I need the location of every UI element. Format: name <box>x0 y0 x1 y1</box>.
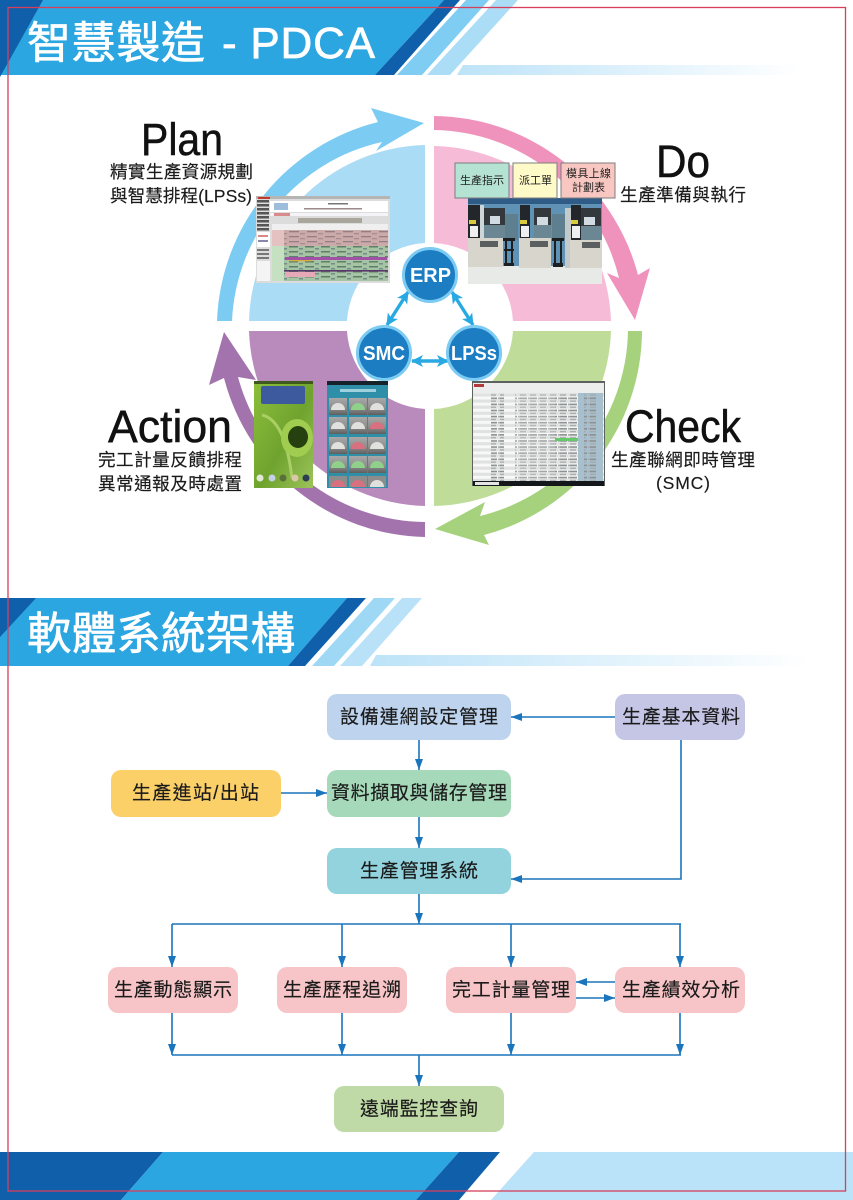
tag: production instruction: 生產指示 <box>460 173 504 187</box>
hub: SMC: SMC <box>363 343 405 365</box>
tag: mold schedule <box>561 163 615 198</box>
text block: Do <box>620 136 746 205</box>
quadrant: check <box>434 331 611 506</box>
node: production management <box>327 848 511 894</box>
photo: production machines <box>468 198 602 284</box>
screenshot: scheduling chart <box>256 196 390 283</box>
hub: ERP <box>404 248 456 302</box>
hub: LPSs: LPSs <box>451 343 497 365</box>
node: dynamic display <box>108 967 238 1013</box>
text block: Do: Do <box>656 136 710 187</box>
text block: Plan <box>110 114 253 206</box>
node: dynamic display: 生產動態顯示 <box>114 979 232 1001</box>
footer band <box>0 1152 853 1200</box>
node: completion metering <box>446 967 576 1013</box>
arrow: check <box>435 331 642 545</box>
text block: Check: (SMC) <box>656 473 710 493</box>
node: performance analysis: 生產績效分析 <box>622 979 740 1001</box>
tag: production instruction <box>455 163 509 198</box>
node: data capture <box>327 770 511 817</box>
text block: Plan: 與智慧排程(LPSs) <box>110 186 252 206</box>
arrow: do <box>434 116 650 320</box>
node: traceability: 生產歷程追溯 <box>283 979 401 1001</box>
node: network setup: 設備連網設定管理 <box>340 706 498 728</box>
node: basic data: 生產基本資料 <box>622 706 740 728</box>
tag: mold schedule: 計劃表 <box>572 180 605 194</box>
node: data capture: 資料擷取與儲存管理 <box>331 782 507 804</box>
text block: Check: 生產聯網即時管理 <box>611 450 755 470</box>
phone screenshot: notification <box>254 381 313 488</box>
hub: ERP: ERP <box>410 265 451 287</box>
title: PDCA <box>27 19 376 68</box>
text block: Check <box>611 401 755 493</box>
arrow: plan <box>217 108 424 321</box>
title: software architecture: 軟體系統架構 <box>27 610 295 659</box>
header banner: software architecture <box>0 598 811 666</box>
quadrant: action <box>249 331 425 506</box>
hub: SMC <box>358 326 410 380</box>
tag: dispatch order <box>513 163 557 198</box>
text block: Action <box>98 401 242 494</box>
text block: Action: Action <box>108 401 232 452</box>
tag: mold schedule: 模具上線 <box>566 166 611 180</box>
text block: Do: 生產準備與執行 <box>620 185 746 205</box>
title: PDCA: 智慧製造 <box>27 19 205 68</box>
node: performance analysis <box>615 967 745 1013</box>
node: network setup <box>327 694 511 740</box>
node: check in/out <box>111 770 281 817</box>
quadrant: plan <box>249 145 425 321</box>
text block: Action: 異常通報及時處置 <box>98 474 242 494</box>
node: check in/out: 生產進站/出站 <box>132 782 259 804</box>
node: remote monitoring: 遠端監控查詢 <box>360 1098 478 1120</box>
PDCA cycle diagram <box>98 108 755 545</box>
connector arrows between hubs <box>387 292 473 361</box>
text block: Plan: Plan <box>141 114 223 165</box>
text block: Action: 完工計量反饋排程 <box>98 450 242 470</box>
phone screenshot: gauges <box>327 381 388 488</box>
node: completion metering: 完工計量管理 <box>452 979 570 1001</box>
node: traceability <box>277 967 407 1013</box>
node: production management: 生產管理系統 <box>360 860 478 882</box>
screenshot: monitoring table <box>472 381 605 486</box>
quadrant: do <box>434 146 611 321</box>
node: remote monitoring <box>334 1086 504 1132</box>
text block: Plan: 精實生產資源規劃 <box>110 162 253 182</box>
flow connectors <box>172 717 681 1086</box>
tag: dispatch order: 派工單 <box>519 174 552 187</box>
arrow: action <box>209 332 425 537</box>
header banner: PDCA <box>0 0 800 77</box>
text block: Check: Check <box>625 401 741 452</box>
title: PDCA: - PDCA <box>222 19 376 68</box>
hub: LPSs <box>448 326 500 380</box>
flowchart <box>108 694 745 1132</box>
node: basic data <box>615 694 745 740</box>
